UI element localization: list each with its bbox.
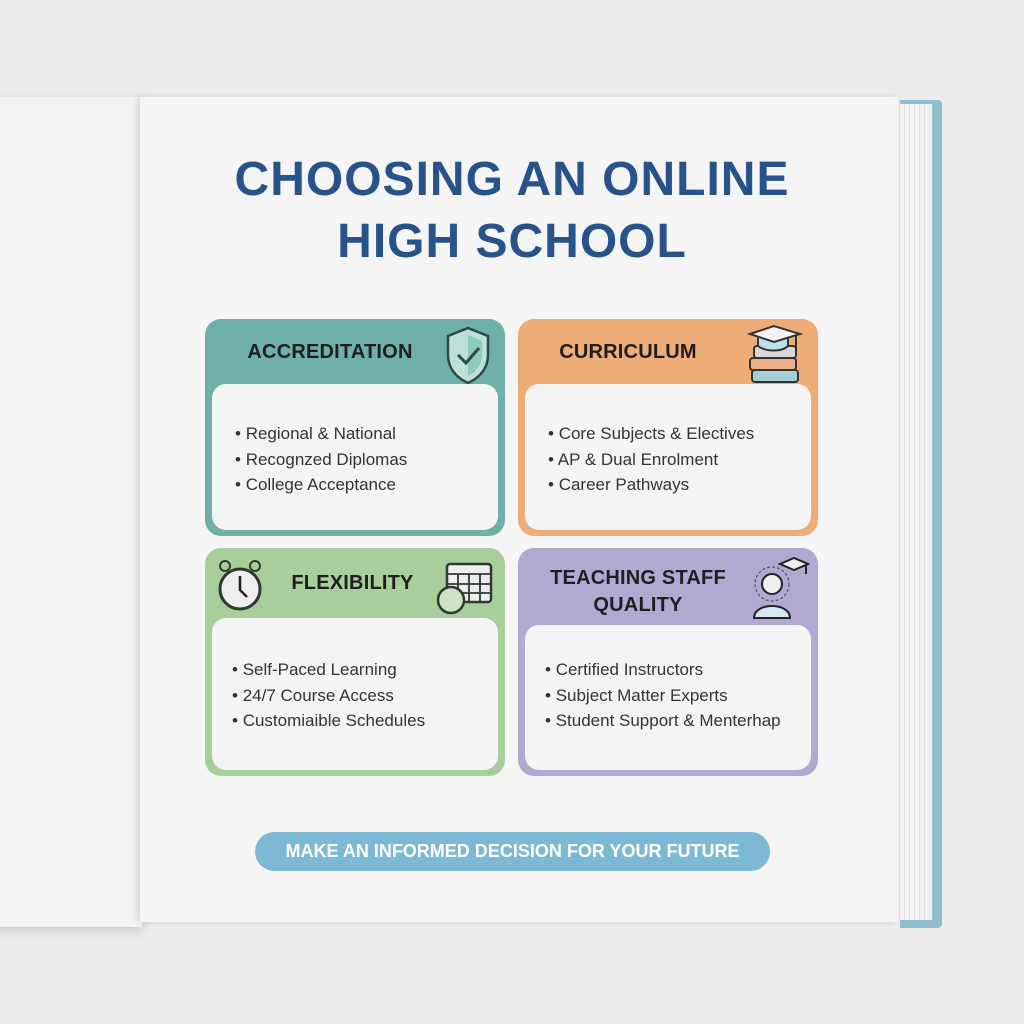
list: curriculum: Core Subjects & Electives: [559, 424, 754, 443]
title: [235, 153, 789, 268]
list: teaching staff: Certified Instructors: [556, 660, 703, 679]
icon: clock: [218, 560, 262, 610]
list: accreditation: Regional & National: [246, 424, 396, 443]
heading: accreditation: ACCREDITATION: [247, 341, 413, 363]
book right page: [140, 97, 898, 922]
list: curriculum: [548, 424, 754, 494]
panel: flexibility: [205, 548, 505, 776]
heading: curriculum: CURRICULUM: [559, 341, 697, 363]
icon: shield: [446, 326, 490, 384]
list: teaching staff: Subject Matter Experts: [556, 686, 728, 704]
list: flexibility: [232, 660, 425, 730]
icon: calendar: [436, 562, 492, 614]
list: curriculum: AP & Dual Enrolment: [558, 450, 718, 468]
book cover edge: [900, 100, 942, 928]
list: accreditation: [236, 424, 407, 494]
title: CHOOSING AN ONLINE: [235, 153, 789, 206]
heading: teaching staff quality: TEACHING STAFF: [550, 567, 726, 589]
list: teaching staff: Student Support & Menterhap: [556, 711, 781, 730]
list: flexibility: Customiaible Schedules: [243, 711, 425, 730]
page edges: [890, 104, 932, 920]
heading: teaching staff quality: [550, 567, 726, 616]
list: flexibility: 24/7 Course Access: [243, 686, 394, 704]
book left page: [0, 97, 142, 927]
icon: books and cap: [747, 325, 804, 383]
list: flexibility: Self-Paced Learning: [243, 660, 397, 679]
title: HIGH SCHOOL: [337, 215, 687, 268]
list: accreditation: Recognzed Diplomas: [246, 450, 407, 468]
list: accreditation: College Acceptance: [246, 475, 396, 494]
panel: accreditation: [205, 319, 505, 536]
list: teaching staff: [546, 660, 781, 730]
heading: flexibility: FLEXIBILITY: [291, 572, 414, 594]
list: curriculum: Career Pathways: [559, 475, 689, 494]
heading: teaching staff quality: QUALITY: [593, 594, 683, 616]
footer banner: [255, 832, 770, 871]
panel: curriculum: [518, 319, 818, 536]
footer banner: MAKE AN INFORMED DECISION FOR YOUR FUTURE: [285, 841, 740, 861]
panel: teaching staff quality: [518, 548, 818, 776]
icon: teacher: [753, 556, 810, 619]
